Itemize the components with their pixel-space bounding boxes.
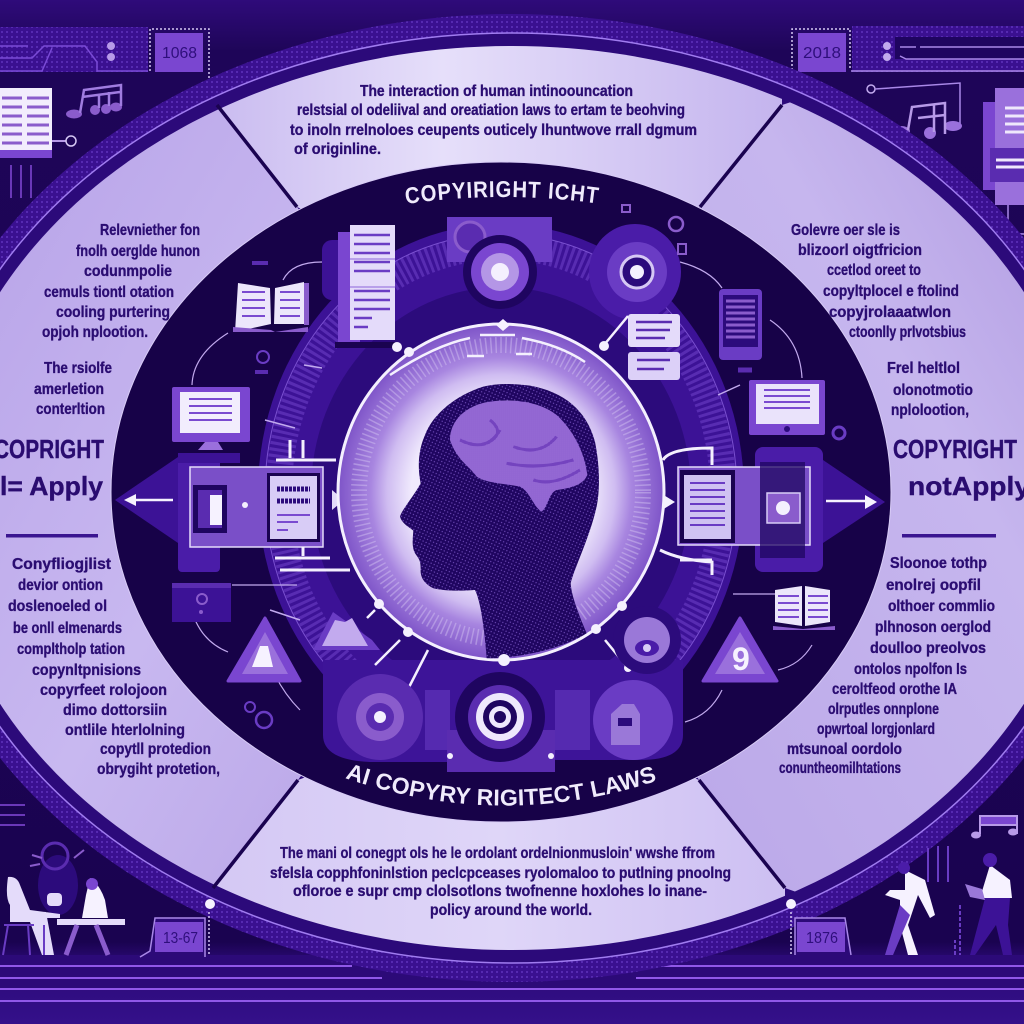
icon: right house disc <box>593 680 673 760</box>
text block: right lower: opwrtoal lorgjonlard <box>817 721 935 738</box>
text block: left upper: conterltion <box>36 401 105 418</box>
connector nodes around halo <box>367 319 632 698</box>
text block: left lower: dimo dottorsiin <box>63 702 167 719</box>
heading: left copyright <box>0 434 104 538</box>
year marker: 2018 <box>785 29 850 95</box>
arrow panel: left <box>115 440 350 572</box>
year marker: 13-67: 13-67 <box>163 930 198 947</box>
text block: right lower <box>779 555 995 777</box>
text block: left upper: cooling purtering <box>56 304 170 321</box>
icon: eye lens right <box>589 205 686 320</box>
arrow panel: right <box>660 447 885 575</box>
circuit strip: top right <box>851 26 1024 72</box>
icon: document stack <box>322 225 402 352</box>
text block: left lower <box>8 556 220 778</box>
text block: left lower: Conyfliogjlist <box>12 556 112 573</box>
idea figure <box>30 843 84 915</box>
head silhouette with brain <box>400 384 599 658</box>
icon: warning triangle right <box>703 618 777 681</box>
text block: bottom panel: sfelsla copphfoninlstion peclcpceases ryolomaloo to putlning pnoolng <box>270 865 731 882</box>
text block: left lower: ontlile hterlolning <box>65 722 185 739</box>
text block: left lower: copyrfeet rolojoon <box>40 682 167 699</box>
icon: open book top left <box>0 88 76 198</box>
icon: monitor right <box>749 380 845 439</box>
table <box>57 919 125 925</box>
lower body behind icons <box>323 660 683 772</box>
icon: monitor left <box>172 387 250 450</box>
text block: right lower: ceroltfeod orothe IA <box>832 681 957 698</box>
text block: right lower: conuntheomilhtations <box>779 760 901 777</box>
text block: left lower: copytll protedion <box>100 741 211 758</box>
text block: left upper: amerletion <box>34 381 104 398</box>
text block: right lower: mtsunoal oordolo <box>787 741 902 758</box>
head profile <box>400 384 599 658</box>
year marker: 1068 <box>150 29 215 94</box>
text block: right lower: enolrej oopfil <box>886 577 981 594</box>
inner dark ellipse <box>111 162 891 822</box>
icon: center eye lens <box>447 672 555 772</box>
panel: left <box>0 110 301 884</box>
icon: note cards <box>599 314 680 380</box>
text block: right upper: ccetlod oreet to <box>827 262 921 279</box>
text block: left lower: obrygiht protetion, <box>97 761 220 778</box>
circuit strip: top left <box>0 27 148 72</box>
central disc with striped rings <box>258 224 744 760</box>
text block: right upper: copyltplocel e ftolind <box>823 283 959 300</box>
text block: left lower: doslenoeled ol <box>8 598 107 615</box>
brain <box>450 400 587 512</box>
icon: mountain badge <box>313 612 380 650</box>
seated person left <box>7 877 60 955</box>
figure two <box>980 865 1012 898</box>
text block: left upper: Relevniether fon <box>100 222 200 239</box>
text block: right upper <box>791 222 973 419</box>
icon: warning triangle left <box>228 618 300 728</box>
text block: left upper: fnolh oerglde hunon <box>76 243 200 260</box>
icon: document top right <box>983 88 1024 244</box>
heading: arc bottom: AI COPYRY RIGITECT LAWS <box>346 765 656 806</box>
icon: tablet <box>719 289 762 370</box>
panel: top <box>222 46 782 208</box>
text block: top panel: relstsial ol odeliival and oreatiation laws to ertam te beohving <box>297 102 685 119</box>
icon: eye disc right <box>613 606 681 674</box>
icon: warning triangle right: 9 <box>732 641 750 677</box>
text block: right lower: plhnoson oerglod <box>875 619 991 636</box>
text block: right upper: copyjrolaaatwlon <box>829 304 951 321</box>
text block: bottom panel: ofloroe e supr cmp clolsotlons twofnenne hoxlohes lo inane- <box>293 883 707 900</box>
text block: bottom panel: The mani ol conegpt ols he le ordolant ordelnionmusloin' wwshe ffrom <box>280 845 715 862</box>
text block: bottom panel: policy around the world. <box>430 902 592 919</box>
text block: top panel: to inoln rrelnoloes ceupents outicely lhuntwove rrall dgmum <box>290 122 697 139</box>
text block: right lower: doulloo preolvos <box>870 640 986 657</box>
text block: right upper: olonotmotio <box>893 382 973 399</box>
figure one <box>885 870 935 955</box>
text block: right upper: Golevre oer sle is <box>791 222 900 239</box>
heading: right copyright: notApply <box>908 471 1024 501</box>
text block: left lower: devior ontion <box>18 577 103 594</box>
walking people: bottom right <box>885 816 1018 955</box>
text block: right upper: ctoonlly prlvotsbius <box>849 324 966 341</box>
text block: bottom panel <box>270 845 731 919</box>
seated person right <box>82 878 108 918</box>
icon: open book right <box>773 586 835 630</box>
people at table: bottom left <box>3 843 125 955</box>
text block: left upper: opjoh nplootion. <box>42 324 148 341</box>
text block: left lower: be onll elmenards <box>13 620 122 637</box>
text block: top panel <box>290 83 697 158</box>
icon: left lens disc <box>337 674 423 760</box>
icon: small box lower left <box>172 583 231 622</box>
year marker: 1068: 1068 <box>162 45 197 62</box>
text block: left lower: copynltpnisions <box>32 662 141 679</box>
text block: top panel: The interaction of human intinoouncation <box>360 83 633 100</box>
icon: open book <box>233 263 309 372</box>
heading: left copyright: l= Apply <box>0 471 104 501</box>
halo circle <box>338 324 664 660</box>
text block: right lower: olthoer commlio <box>888 598 995 615</box>
text block: left upper: cemuls tiontl otation <box>44 284 174 301</box>
text block: left upper: The rsiolfe <box>44 360 112 377</box>
year marker: 2018: 2018 <box>803 45 841 62</box>
text block: right lower: ontolos npolfon Is <box>854 661 967 678</box>
text block: right upper: blizoorl oigtfricion <box>798 242 922 259</box>
icon: camera top <box>447 217 552 309</box>
year marker: 1876: 1876 <box>806 930 838 947</box>
panel: bottom <box>217 778 785 950</box>
text block: right upper: Frel heltlol <box>887 360 960 377</box>
floor and bottom circuit lines <box>0 805 1024 1001</box>
text block: right upper: nplolootion, <box>891 402 969 419</box>
text block: right lower: olrputles onnplone <box>828 701 939 718</box>
text block: left upper <box>34 222 200 418</box>
text block: left lower: compltholp tation <box>17 641 125 658</box>
music note <box>980 816 1017 834</box>
text block: top panel: of originline. <box>294 141 381 158</box>
panel: right <box>698 102 1024 892</box>
year marker: 1876 <box>786 899 851 955</box>
heading: arc top: COPYIRIGHT ICHT <box>406 181 600 204</box>
connector lines <box>172 262 812 722</box>
text block: left upper: codunmpolie <box>84 263 172 280</box>
icon: music notes top left <box>66 85 122 118</box>
heading: right copyright <box>893 434 1024 538</box>
icon: music notes top right <box>867 83 962 139</box>
text block: right lower: Sloonoe tothp <box>890 555 987 572</box>
year marker: 13-67 <box>140 899 215 957</box>
panel dividers <box>213 105 785 888</box>
